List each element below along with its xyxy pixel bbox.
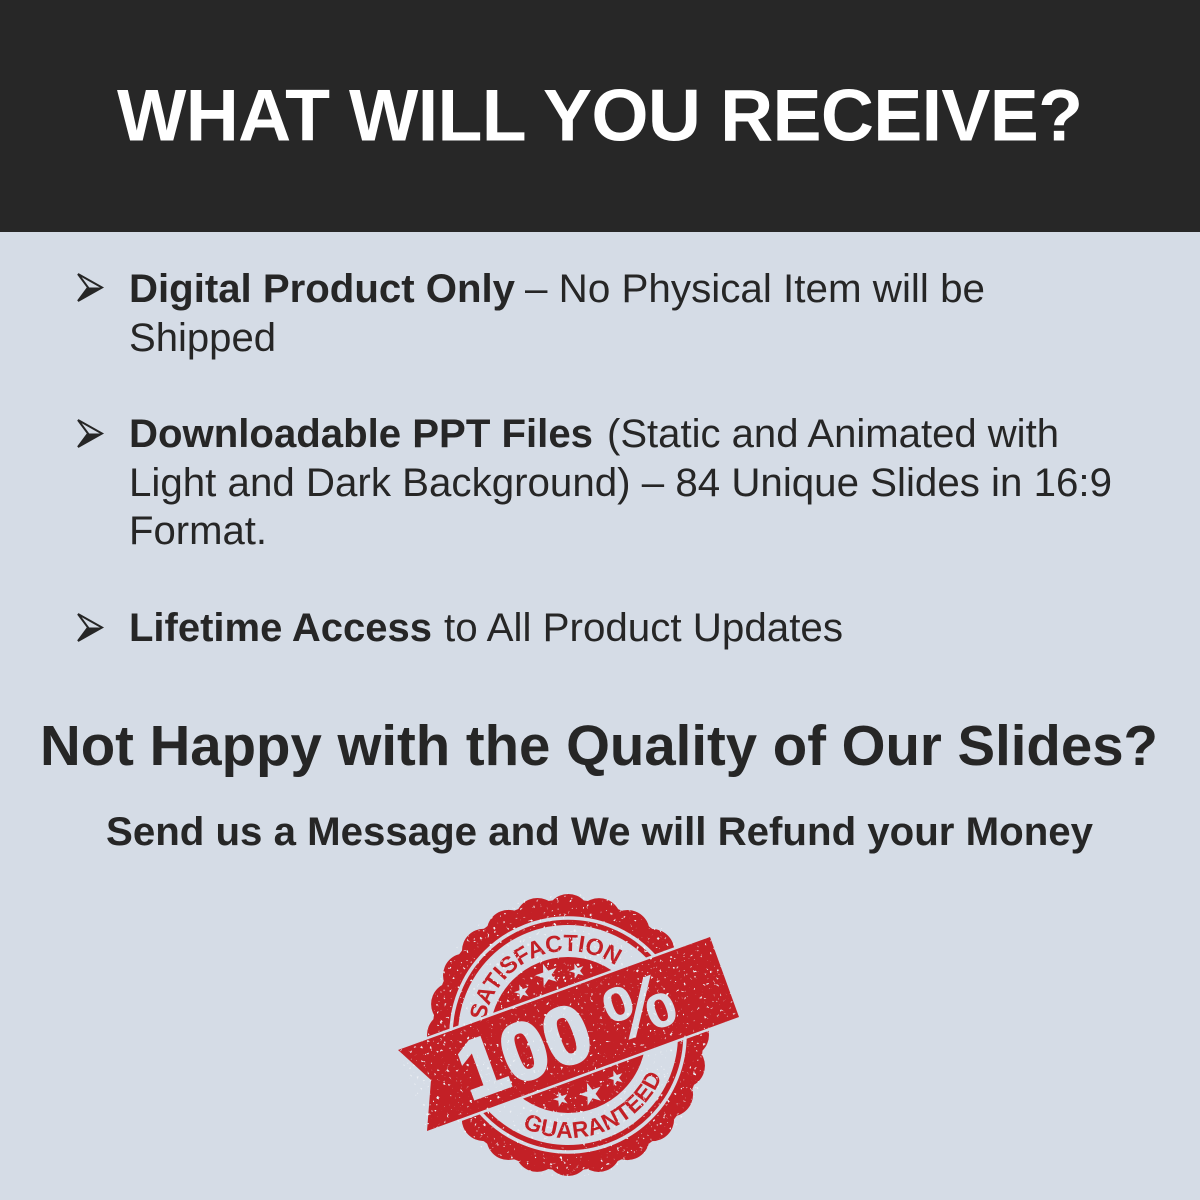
- bullet: downloadable ppt files: (Static and Animated with: [607, 412, 1059, 456]
- heading: not happy: Not Happy with the Quality of Our Slides?: [40, 714, 1158, 777]
- bullet: digital product only: [78, 267, 985, 360]
- bullet: digital product only: – No Physical Item will be: [525, 267, 985, 311]
- subheading: refund: Send us a Message and We will Refund your Money: [106, 810, 1094, 854]
- ribbon text: percent: %: [592, 954, 687, 1060]
- bullet: digital product only: Digital Product Only: [129, 267, 516, 311]
- distress speckle: [395, 890, 745, 1180]
- icon: arrow bullet: [78, 420, 102, 447]
- bullet: downloadable ppt files: Downloadable PPT Files: [129, 412, 593, 456]
- ribbon: [398, 937, 739, 1131]
- bullet: downloadable ppt files: Light and Dark Background) – 84 Unique Slides in 16:9: [129, 461, 1112, 505]
- seal text: guaranteed: GUARANTEED: [525, 1072, 660, 1138]
- icon: arrow bullet: [78, 614, 102, 641]
- bullet: digital product only: Shipped: [129, 316, 276, 360]
- bullet: lifetime access: [78, 606, 843, 650]
- icon: arrow bullet: [78, 274, 102, 301]
- stars: [512, 960, 625, 1108]
- ribbon text: 100: 100: [446, 986, 604, 1117]
- icon: satisfaction guaranteed stamp: [398, 893, 739, 1177]
- bullet: lifetime access: Lifetime Access: [129, 606, 432, 650]
- seal rings: [451, 918, 685, 1152]
- header band: [0, 0, 1200, 232]
- bullet: lifetime access: to All Product Updates: [444, 606, 843, 650]
- title: WHAT WILL YOU RECEIVE?: [117, 74, 1083, 156]
- bullet: downloadable ppt files: Format.: [129, 509, 267, 553]
- bullet: downloadable ppt files: [78, 412, 1112, 553]
- scalloped seal: [432, 900, 704, 1170]
- seal text: satisfaction: SATISFACTION: [470, 934, 622, 1018]
